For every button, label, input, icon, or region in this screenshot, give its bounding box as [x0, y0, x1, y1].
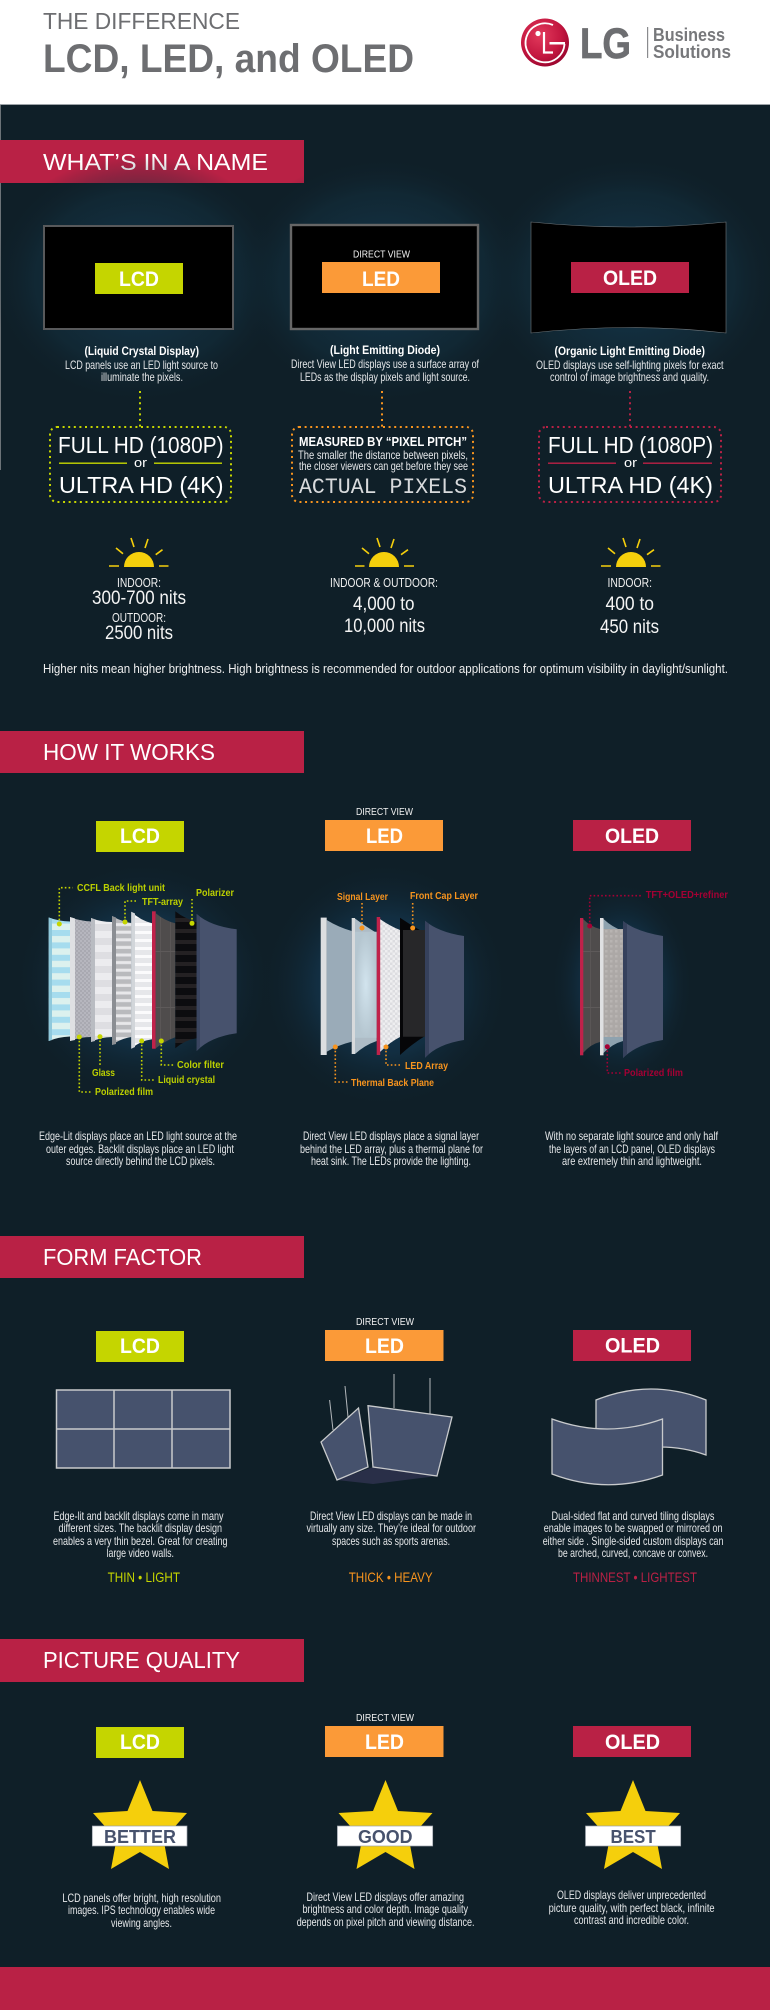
section heading: Picture quality: PICTURE QUALITY	[43, 1647, 240, 1673]
LCD description: LCD panels use an LED light source to	[65, 358, 218, 372]
LCD brightness: 300-700 nits	[92, 588, 186, 609]
LED brightness: 4,000 to	[353, 594, 414, 615]
label: TFT+OLED+refiner	[587, 889, 728, 928]
label: Polarized film: Polarized film	[95, 1086, 153, 1098]
LED description: (Light Emitting Diode)	[330, 343, 440, 357]
label: Color filter	[159, 1038, 224, 1071]
OLED tag: OLED	[605, 1334, 660, 1358]
LED form factor text	[306, 1509, 476, 1548]
label: Polarizer: Polarizer	[196, 887, 234, 899]
OLED form factor text	[543, 1509, 724, 1560]
LCD form factor text: Edge-lit and backlit displays come in many	[54, 1509, 224, 1523]
OLED how-it-works text: With no separate light source and only half	[545, 1129, 718, 1143]
LCD resolution callout: FULL HD (1080P)	[58, 432, 224, 458]
label: Thermal Back Plane: Thermal Back Plane	[351, 1077, 434, 1089]
OLED tag	[573, 1330, 691, 1361]
LCD description: (Liquid Crystal Display)	[84, 344, 199, 358]
LCD form factor text: large video walls.	[106, 1546, 174, 1560]
LED tag: DIRECT VIEW	[356, 1316, 414, 1328]
LCD tag: LCD	[120, 1335, 160, 1358]
label: CCFL back light unit: CCFL Back light unit	[77, 882, 165, 894]
OLED layer diagram	[550, 880, 728, 1090]
OLED how-it-works text: are extremely thin and lightweight.	[562, 1154, 702, 1168]
label: Color filter: Color filter	[177, 1059, 224, 1071]
section heading: Form factor	[0, 1236, 304, 1278]
OLED quality star: BEST	[610, 1827, 656, 1847]
OLED resolution callout: FULL HD (1080P)	[548, 432, 713, 458]
LED layer diagram	[260, 860, 510, 1110]
LCD description: illuminate the pixels.	[101, 370, 183, 384]
LED thick and heavy: THICK • HEAVY	[349, 1569, 433, 1585]
LED tag: LED	[365, 1335, 404, 1358]
OLED resolution callout: or	[624, 455, 638, 470]
OLED brightness: 450 nits	[600, 617, 659, 638]
OLED resolution callout	[539, 391, 721, 502]
icon: sun LCD	[109, 538, 168, 567]
LCD resolution callout: ULTRA HD (4K)	[59, 472, 224, 498]
LED tag: LED	[365, 1731, 404, 1754]
LED picture quality text: Direct View LED displays offer amazing	[306, 1890, 464, 1904]
label: Glass: Glass	[92, 1067, 115, 1079]
direct view LED screen	[291, 225, 478, 329]
LED how-it-works text: behind the LED array, plus a thermal plane for	[300, 1142, 483, 1156]
LCD tag: LCD	[120, 1731, 160, 1754]
LED tag: DIRECT VIEW	[356, 1712, 414, 1724]
LED how-it-works text	[300, 1129, 483, 1168]
section heading: Picture quality	[0, 1639, 304, 1682]
OLED tag	[573, 1726, 691, 1757]
LCD tag	[96, 1331, 184, 1362]
section heading: What's in a name: WHAT’S IN A NAME	[43, 149, 268, 175]
LCD resolution callout	[50, 391, 231, 502]
label: Polarizer	[190, 887, 234, 926]
LCD resolution callout: or	[134, 455, 148, 470]
label: Thermal Back Plane	[333, 1044, 434, 1089]
LCD form factor text: enables a very thin bezel. Great for creating	[53, 1534, 228, 1548]
OLED brightness: INDOOR:	[608, 575, 652, 590]
LED picture quality text: brightness and color depth. Image quality	[302, 1902, 468, 1916]
LED tag: LED	[366, 825, 403, 848]
LED tag	[325, 1712, 444, 1757]
LED description: LEDs as the display pixels and light source.	[300, 370, 470, 384]
LED picture quality text	[297, 1890, 474, 1929]
LED tag: DIRECT VIEW	[356, 806, 413, 818]
header title	[43, 8, 414, 81]
LED quality star: GOOD	[358, 1827, 413, 1847]
label: CCFL back light unit	[57, 882, 165, 926]
LCD quality star: BETTER	[104, 1827, 176, 1847]
label: TFT-array	[122, 896, 183, 924]
OLED picture quality text	[549, 1888, 715, 1927]
label: TFT+OLED+refiner: TFT+OLED+refiner	[646, 889, 728, 901]
LED brightness: INDOOR & OUTDOOR:	[330, 575, 438, 590]
LED description: Direct View LED displays use a surface array of	[291, 357, 479, 371]
LCD how-it-works text: outer edges. Backlit displays place an LED light	[46, 1142, 234, 1156]
video wall illustration	[56, 1390, 230, 1468]
OLED thinnest and lightest: THINNEST • LIGHTEST	[573, 1569, 697, 1585]
label: Polarized film	[77, 1034, 153, 1098]
OLED form factor text: be arched, curved, concave or convex.	[558, 1546, 708, 1560]
OLED picture quality text: picture quality, with perfect black, infinite	[549, 1901, 715, 1915]
LCD screen: LCD	[119, 268, 159, 291]
label: Front Cap Layer: Front Cap Layer	[410, 890, 478, 902]
LCD how-it-works text: Edge-Lit displays place an LED light source at the	[39, 1129, 237, 1143]
LG Business Solutions logo	[521, 18, 731, 68]
OLED tag	[573, 820, 691, 851]
LCD picture quality text: images. IPS technology enables wide	[68, 1903, 215, 1917]
OLED tag: OLED	[605, 825, 659, 848]
LED description	[291, 343, 479, 384]
OLED picture quality text: contrast and incredible color.	[574, 1913, 689, 1927]
LED how-it-works text: Direct View LED displays place a signal layer	[303, 1129, 479, 1143]
label: Polarized film	[605, 1044, 683, 1079]
section heading: What's in a name	[0, 140, 304, 183]
direct view LED screen: DIRECT VIEW	[353, 248, 410, 260]
section heading: Form factor: FORM FACTOR	[43, 1244, 202, 1270]
LED form factor text: virtually any size. They’re ideal for outdoor	[306, 1521, 476, 1535]
OLED brightness	[600, 575, 659, 638]
label: LED Array	[384, 1044, 448, 1072]
LCD tag	[96, 1727, 184, 1758]
LED pixel pitch callout	[292, 391, 473, 502]
OLED description: control of image brightness and quality.	[550, 370, 709, 384]
LED pixel pitch callout: the closer viewers can get before they see	[299, 459, 468, 473]
OLED description: (Organic Light Emitting Diode)	[554, 344, 705, 358]
OLED curved screen: OLED	[603, 267, 657, 290]
OLED brightness: 400 to	[606, 594, 654, 615]
OLED resolution callout: ULTRA HD (4K)	[548, 472, 713, 498]
LED form factor text: spaces such as sports arenas.	[332, 1534, 450, 1548]
LCD brightness: 2500 nits	[105, 623, 173, 644]
section heading: How it works: HOW IT WORKS	[43, 739, 215, 765]
hanging LED cabinets illustration	[321, 1374, 452, 1484]
LCD form factor text	[53, 1509, 228, 1560]
LCD screen	[44, 226, 233, 329]
icon: sun LED	[355, 538, 414, 567]
LED how-it-works text: heat sink. The LEDs provide the lighting.	[311, 1154, 471, 1168]
LCD quality star	[92, 1780, 187, 1869]
LCD picture quality text	[62, 1891, 221, 1930]
header title: LCD, LED, and OLED	[43, 37, 414, 81]
LED pixel pitch callout: MEASURED BY “PIXEL PITCH”	[299, 434, 467, 449]
OLED tag: OLED	[605, 1731, 660, 1754]
LG Business Solutions logo: Business	[653, 25, 725, 45]
label: Signal Layer: Signal Layer	[337, 891, 388, 903]
label: Liquid crystal: Liquid crystal	[158, 1074, 215, 1086]
section heading: How it works	[0, 731, 304, 773]
OLED form factor text: Dual-sided flat and curved tiling displays	[552, 1509, 714, 1523]
LED brightness: 10,000 nits	[344, 616, 425, 637]
LED pixel pitch callout: ACTUAL PIXELS	[299, 475, 467, 500]
LCD layer diagram	[13, 860, 273, 1100]
header	[0, 0, 770, 105]
brightness note: Higher nits mean higher brightness. High brightness is recommended for outdoor applications for optimum visibility in daylight/sunlight.	[43, 662, 728, 676]
OLED how-it-works text	[545, 1129, 718, 1168]
LG Business Solutions logo: Solutions	[653, 42, 731, 62]
label: Liquid crystal	[139, 1038, 215, 1086]
label: Signal Layer	[337, 891, 388, 930]
OLED curved screen	[531, 222, 726, 333]
LED pixel pitch callout: The smaller the distance between pixels,	[298, 448, 468, 462]
LED quality star	[337, 1780, 433, 1869]
LCD brightness	[92, 575, 186, 644]
LCD form factor text: different sizes. The backlit display design	[58, 1521, 222, 1535]
LCD brightness: INDOOR:	[117, 575, 161, 590]
icon: sun OLED	[601, 538, 660, 567]
LCD how-it-works text	[39, 1129, 237, 1168]
LCD picture quality text: LCD panels offer bright, high resolution	[62, 1891, 221, 1905]
LED tag	[325, 1316, 444, 1361]
LCD thin and light: THIN • LIGHT	[108, 1569, 180, 1585]
footer band	[0, 1967, 770, 2010]
OLED picture quality text: OLED displays deliver unprecedented	[557, 1888, 706, 1902]
label: TFT-array: TFT-array	[142, 896, 183, 908]
LCD how-it-works text: source directly behind the LCD pixels.	[66, 1154, 215, 1168]
LED form factor text: Direct View LED displays can be made in	[310, 1509, 472, 1523]
LCD tag	[96, 821, 184, 852]
LED picture quality text: depends on pixel pitch and viewing distance.	[297, 1915, 474, 1929]
LED tag	[325, 806, 443, 851]
label: LED Array: LED Array	[405, 1060, 448, 1072]
LED brightness	[330, 575, 438, 637]
label: Front Cap Layer	[410, 890, 478, 930]
header title: THE DIFFERENCE	[43, 8, 240, 34]
LG Business Solutions logo: LG	[580, 20, 631, 68]
label: Glass	[92, 1034, 115, 1079]
LCD picture quality text: viewing angles.	[111, 1916, 172, 1930]
LCD description	[65, 344, 218, 384]
curved OLED panels illustration	[552, 1389, 706, 1485]
LCD brightness: OUTDOOR:	[112, 610, 166, 625]
OLED description	[536, 344, 724, 384]
OLED quality star	[586, 1780, 681, 1869]
label: Polarized film: Polarized film	[624, 1067, 683, 1079]
direct view LED screen: LED	[362, 268, 400, 291]
LCD tag: LCD	[120, 825, 160, 848]
